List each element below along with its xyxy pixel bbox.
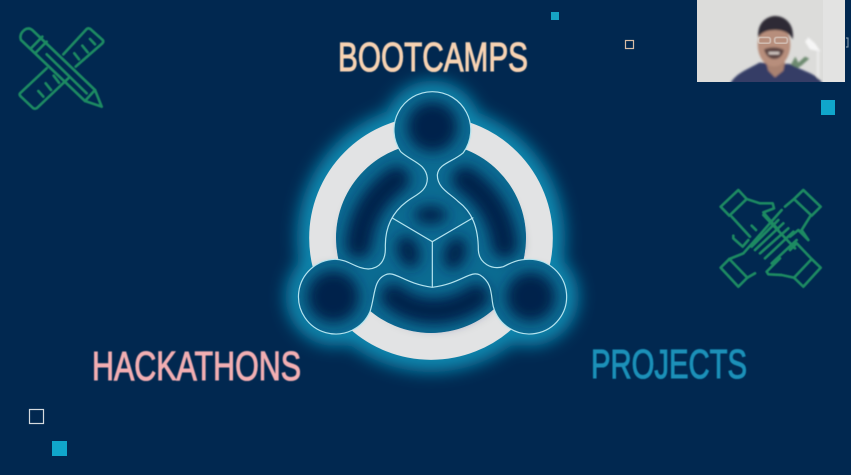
neck [766, 62, 785, 77]
face [758, 23, 790, 67]
hand outlines [729, 199, 812, 278]
dark shading inside the shapes [359, 179, 505, 311]
interlocked fingers [752, 215, 797, 263]
wall [697, 0, 845, 82]
square: small peach outline [626, 40, 634, 48]
cuffs [721, 190, 821, 287]
lighter wall panel [823, 0, 845, 82]
square: teal right [821, 100, 835, 115]
heading: bootcamps: BOOTCAMPS [338, 34, 528, 80]
heading: projects: PROJECTS [591, 341, 747, 387]
outer glow [286, 81, 579, 372]
glasses [758, 37, 787, 43]
lamp [805, 37, 821, 52]
icon: joined hands [721, 190, 821, 287]
node and connector fill [298, 92, 567, 334]
square: white outline bottom left [30, 410, 44, 424]
square: partial outline far right [846, 38, 848, 47]
shirt [729, 63, 823, 85]
square: small teal top [551, 12, 559, 20]
white ring [323, 130, 539, 346]
hair [758, 16, 793, 39]
icon: pencil and ruler [20, 28, 103, 109]
heading: hackathons: HACKATHONS [92, 343, 301, 389]
inner disc [336, 143, 526, 333]
thin outlines [298, 92, 567, 334]
person and room [729, 14, 824, 82]
plant [791, 57, 809, 69]
teeth [769, 52, 779, 54]
square: teal bottom left [52, 441, 67, 456]
central logo: ring with three connected nodes [286, 81, 579, 372]
webcam inset: presenter [697, 0, 845, 85]
mouth and beard [764, 47, 784, 59]
